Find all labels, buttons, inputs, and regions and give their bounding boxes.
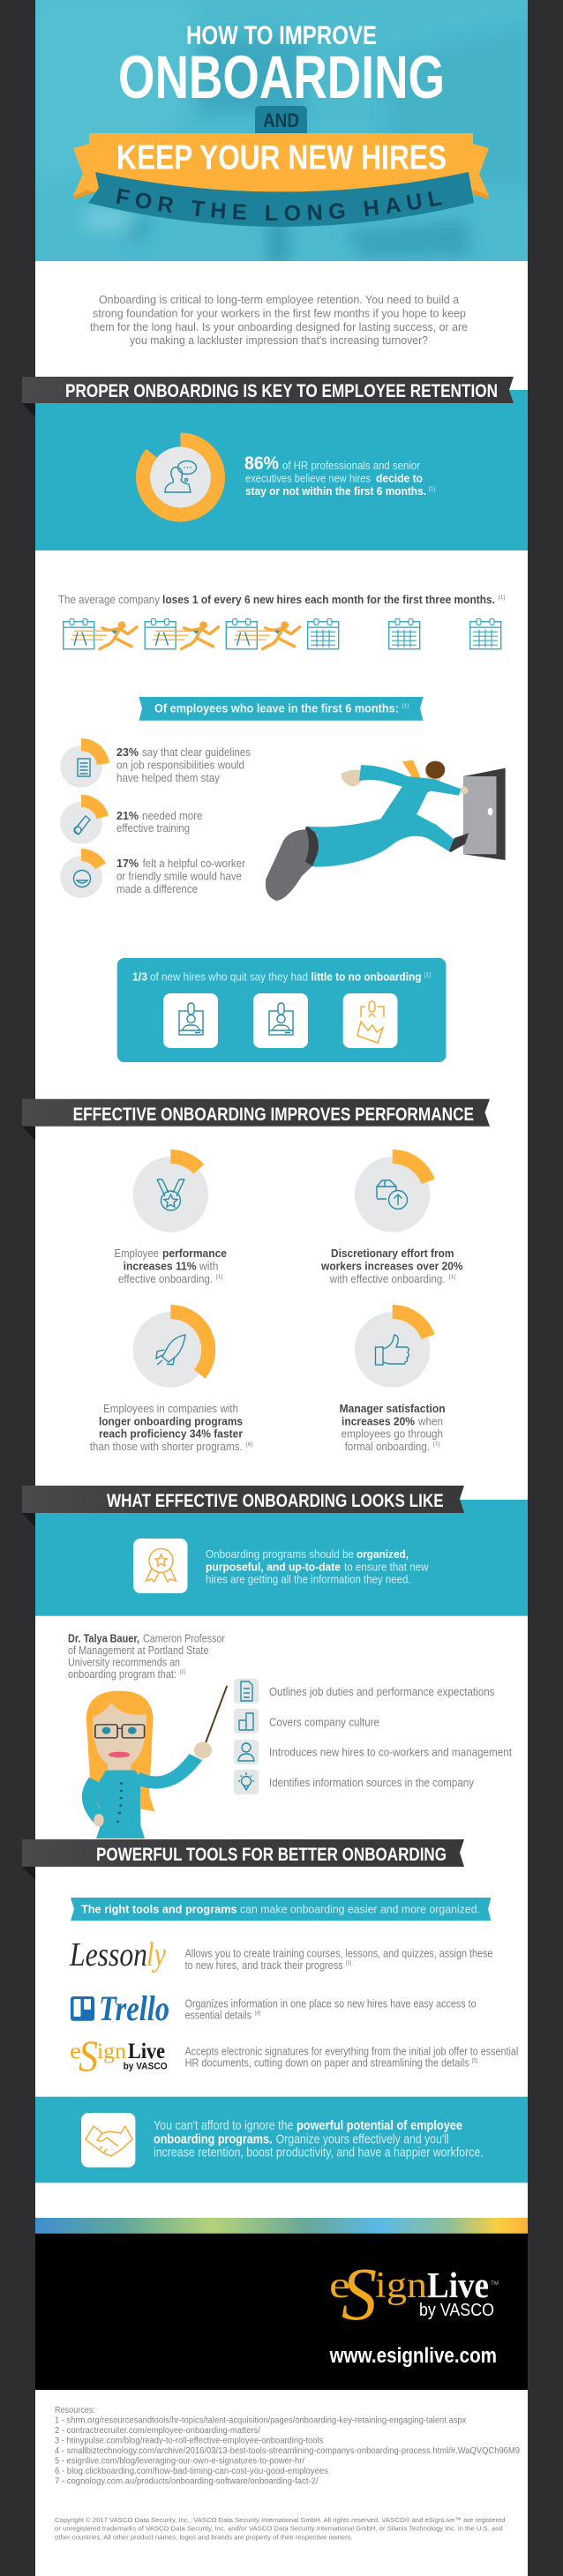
stat text: decide to bbox=[376, 472, 423, 485]
reason: 17% friendly smile: 17% bbox=[116, 857, 139, 870]
icon: diploma bbox=[74, 816, 90, 835]
tool: Lessonly: [3] bbox=[346, 1960, 351, 1966]
tool: eSignLive: HR documents, cutting down on paper and streamlining the details bbox=[185, 2056, 469, 2070]
section banner 1 bbox=[22, 377, 514, 417]
logo: eSignLive by VASCO: TM bbox=[491, 2280, 499, 2287]
section banner 4: POWERFUL TOOLS FOR BETTER ONBOARDING bbox=[96, 1845, 447, 1865]
checklist: recommendations bbox=[234, 1679, 512, 1794]
reason: 23% guidelines: 23% bbox=[116, 745, 139, 759]
metric: manager satisfaction 20%: employees go through bbox=[342, 1427, 443, 1441]
illustration: woman with pointer bbox=[86, 1686, 227, 1838]
loses 1 of 6 statement: The average company bbox=[58, 593, 160, 606]
metric: performance 11%: [1] bbox=[216, 1274, 222, 1280]
reason: 21% training: needed more bbox=[142, 809, 203, 822]
metric: proficiency 34%: Employees in companies with bbox=[103, 1402, 238, 1415]
section banner 2: EFFECTIVE ONBOARDING IMPROVES PERFORMANCE bbox=[73, 1105, 474, 1125]
panel: 1/3 of new hires: [1] bbox=[424, 972, 431, 978]
panel: 86% stat band bbox=[35, 390, 528, 550]
metric: performance 11% bbox=[115, 1157, 227, 1285]
logo: eSignLive by VASCO bbox=[329, 2251, 499, 2336]
and tab: AND bbox=[263, 109, 299, 131]
stat text: of HR professionals and senior bbox=[282, 459, 421, 472]
calendar and runner pictogram row bbox=[64, 618, 501, 649]
reason: 17% friendly smile: or friendly smile would have bbox=[116, 870, 242, 883]
section banner 3: WHAT EFFECTIVE ONBOARDING LOOKS LIKE bbox=[107, 1491, 444, 1511]
website url: www.esignlive.com bbox=[329, 2344, 497, 2368]
ribbon headline: KEEP YOUR NEW HIRES bbox=[116, 139, 447, 176]
ribbon: right tools: The right tools and programs bbox=[81, 1902, 237, 1915]
panel: closing statement band: onboarding programs. bbox=[154, 2131, 272, 2146]
copyright notice: Copyright © 2017 VASCO Data Security, Inc., VASCO Data Security International GmbH. All rights reserved. VASCO® and eSignLive™ are registered bbox=[55, 2516, 506, 2524]
metric: performance 11%: increases 11% bbox=[124, 1260, 197, 1273]
loses 1 of 6 statement: [1] bbox=[499, 595, 505, 601]
section banner 3 bbox=[22, 1486, 464, 1527]
rainbow gradient strip bbox=[35, 2218, 528, 2234]
curved tagline: FOR THE LONG HAUL bbox=[116, 189, 442, 221]
reason: 17% friendly smile bbox=[60, 855, 246, 898]
logo: Lessonly: Lesson bbox=[69, 1936, 147, 1973]
icon: thumbs up bbox=[376, 1335, 409, 1365]
tool: Trello: essential details bbox=[185, 2009, 251, 2022]
donut chart: 86% bbox=[143, 439, 218, 515]
copyright notice bbox=[55, 2516, 506, 2541]
panel: organized, purposeful band: hires are getting all the information they need. bbox=[206, 1573, 411, 1586]
Dr. Talya Bauer intro: onboarding program that: bbox=[68, 1667, 176, 1681]
metric: proficiency 34% bbox=[90, 1312, 252, 1453]
item: introduces co-workers: Introduces new hires to co-workers and management bbox=[269, 1746, 512, 1759]
tool: Lessonly: Allows you to create training courses, lessons, and quizzes, assign these bbox=[185, 1947, 492, 1960]
panel: organized, purposeful band: Onboarding programs should be bbox=[206, 1547, 354, 1561]
logo: eSignLive by VASCO: ign bbox=[375, 2265, 427, 2306]
stat text: executives believe new hires bbox=[245, 472, 371, 485]
tool: Trello: [4] bbox=[255, 2011, 260, 2017]
reason: 23% guidelines: have helped them stay bbox=[116, 771, 220, 784]
metric: manager satisfaction 20%: formal onboarding. bbox=[345, 1440, 430, 1453]
Dr. Talya Bauer intro: of Management at Portland State bbox=[68, 1644, 208, 1657]
logo: eSignLive by VASCO: S bbox=[342, 2251, 377, 2336]
ribbon: right tools bbox=[71, 1898, 491, 1921]
resources list bbox=[55, 2406, 520, 2486]
resources list: 4 - smallbiztechnology.com/archive/2016/03/13-best-tools-streamlining-companys-onboarding-process.html/#.WaQVQCh96M9 bbox=[55, 2446, 520, 2456]
panel: closing statement band: increase retention, boost productivity, and have a happier workforce. bbox=[154, 2145, 484, 2160]
intro paragraph: you making a lackluster impression that's increasing turnover? bbox=[130, 333, 428, 347]
metric: manager satisfaction 20%: increases 20% bbox=[342, 1414, 415, 1427]
reason: 23% guidelines: on job responsibilities would bbox=[116, 759, 244, 772]
logo: eSignLive by VASCO: Live bbox=[427, 2265, 489, 2305]
intro paragraph: them for the long haul. Is your onboarding designed for lasting success, or are bbox=[90, 320, 468, 333]
teal curved ribbon bbox=[88, 172, 474, 227]
intro paragraph: Onboarding is critical to long-term employee retention. You need to build a bbox=[99, 293, 460, 306]
item: information sources bbox=[234, 1770, 474, 1794]
metric: proficiency 34%: than those with shorter programs. bbox=[90, 1440, 243, 1453]
panel: organized, purposeful band: to ensure that new bbox=[344, 1560, 429, 1573]
reason: 17% friendly smile: made a difference bbox=[116, 882, 198, 895]
icon card: award ribbon bbox=[133, 1539, 187, 1593]
resources list: 1 - shrm.org/resourcesandtools/hr-topics/talent-acquisition/pages/onboarding-key-retaining-engaging-talent.aspx bbox=[55, 2416, 466, 2426]
metric: performance 11%: effective onboarding. bbox=[118, 1272, 213, 1285]
tool: eSignLive bbox=[70, 2031, 518, 2080]
metric: performance 11%: with bbox=[199, 1260, 219, 1273]
ribbon: of employees who leave bbox=[139, 697, 424, 721]
metric: proficiency 34%: reach proficiency 34% faster bbox=[99, 1427, 243, 1441]
icon: medal bbox=[157, 1179, 184, 1210]
resources list: 7 - cognology.com.au/products/onboarding-software/onboarding-fact-2/ bbox=[55, 2476, 319, 2486]
metric: manager satisfaction 20%: when bbox=[417, 1414, 443, 1427]
panel: closing statement band: Organize yours effectively and you'll bbox=[276, 2131, 449, 2146]
icon card: broken id badge bbox=[343, 993, 397, 1048]
item: company culture: Covers company culture bbox=[269, 1715, 379, 1728]
icon: document bbox=[78, 759, 90, 776]
item: company culture bbox=[234, 1709, 379, 1734]
intro paragraph bbox=[90, 293, 468, 347]
icon card: handshake bbox=[81, 2113, 135, 2168]
tool: Trello: Organizes information in one place so new hires have easy access to bbox=[185, 1996, 477, 2010]
reason: 21% training bbox=[60, 801, 203, 843]
panel: 1/3 of new hires: little to no onboarding bbox=[311, 970, 422, 984]
icon: box with arrow bbox=[377, 1180, 408, 1209]
resources list: 6 - blog.clickboarding.com/how-bad-timing-can-cost-you-good-employees bbox=[55, 2467, 328, 2476]
panel: organized, purposeful band bbox=[35, 1500, 528, 1616]
orange ribbon bbox=[73, 133, 489, 199]
Dr. Talya Bauer intro bbox=[68, 1632, 226, 1681]
icon: person with speech bubble bbox=[165, 461, 196, 492]
resources list: 5 - esignlive.com/blog/leveraging-our-own-e-signatures-to-power-hr/ bbox=[55, 2456, 304, 2466]
tool: Lessonly bbox=[69, 1936, 492, 1973]
logo: eSignLive: ign bbox=[97, 2040, 127, 2063]
metric: manager satisfaction 20%: [7] bbox=[433, 1442, 439, 1448]
resources list: 3 - htinypulse.com/blog/ready-to-roll-effective-employee-onboarding-tools bbox=[55, 2436, 323, 2445]
ribbon: right tools: can make onboarding easier and more organized. bbox=[240, 1902, 480, 1915]
reason: 21% training: 21% bbox=[116, 809, 139, 822]
panel: 1/3 of new hires: 1/3 bbox=[132, 970, 147, 984]
and tab bbox=[255, 106, 307, 133]
tool: Lessonly: to new hires, and track their progress bbox=[185, 1958, 343, 1972]
ribbon: of employees who leave: Of employees who leave in the first 6 months: bbox=[154, 701, 399, 715]
metric: proficiency 34%: longer onboarding programs bbox=[99, 1414, 243, 1427]
section banner 2 bbox=[22, 1099, 490, 1141]
logo: eSignLive: Live bbox=[128, 2040, 165, 2063]
logo: eSignLive: by VASCO bbox=[124, 2062, 168, 2072]
ribbon: of employees who leave: [1] bbox=[402, 703, 409, 709]
metric: discretionary effort 20%: [1] bbox=[449, 1274, 455, 1280]
icon card: id badge 2 bbox=[253, 993, 308, 1048]
copyright notice: or unregistered trademarks of VASCO Data Security, Inc. and/or VASCO Data Security International GmbH, or Silanis Technology Inc. in the U.S. and bbox=[55, 2525, 503, 2533]
Dr. Talya Bauer intro: [2] bbox=[180, 1669, 185, 1675]
logo: eSignLive by VASCO: e bbox=[329, 2265, 350, 2306]
title: onboarding: ONBOARDING bbox=[118, 43, 445, 111]
copyright notice: other countries. All other product names, logos and brands are property of their respective owners. bbox=[55, 2533, 353, 2541]
door bbox=[463, 768, 506, 860]
tool: Trello bbox=[71, 1988, 477, 2028]
stat text: 86% bbox=[244, 453, 279, 474]
Dr. Talya Bauer intro: University recommends an bbox=[68, 1656, 180, 1669]
logo: Trello: Trello bbox=[99, 1988, 169, 2028]
icon: rocket bbox=[156, 1335, 185, 1365]
intro paragraph: strong foundation for your workers in the first few months if you hope to keep bbox=[93, 307, 466, 319]
reason: 17% friendly smile: felt a helpful co-worker bbox=[143, 857, 246, 870]
metric: performance 11%: Employee bbox=[115, 1247, 159, 1260]
metric: discretionary effort 20%: with effective onboarding. bbox=[329, 1272, 446, 1285]
tool: eSignLive: [5] bbox=[472, 2058, 477, 2064]
item: job duties: Outlines job duties and performance expectations bbox=[269, 1685, 495, 1698]
logo: eSignLive: S bbox=[79, 2031, 98, 2080]
metric: discretionary effort 20%: workers increases over 20% bbox=[320, 1260, 463, 1273]
Dr. Talya Bauer intro: Cameron Professor bbox=[143, 1632, 226, 1645]
loses 1 of 6 statement: loses 1 of every 6 new hires each month for the first three months. bbox=[162, 593, 495, 606]
item: information sources: Identifies information sources in the company bbox=[269, 1776, 474, 1789]
illustration: man running out door bbox=[266, 760, 506, 901]
footer: black brand panel bbox=[35, 2234, 528, 2390]
reason: 23% guidelines bbox=[60, 745, 251, 788]
panel: organized, purposeful band: organized, bbox=[357, 1547, 409, 1561]
metric: performance 11%: performance bbox=[162, 1247, 227, 1260]
running man bbox=[266, 760, 469, 901]
panel: closing statement band bbox=[35, 2097, 528, 2183]
logo: eSignLive by VASCO: by VASCO bbox=[419, 2301, 494, 2320]
metric: manager satisfaction 20%: Manager satisfaction bbox=[340, 1402, 446, 1415]
resources list: Resources: bbox=[55, 2406, 95, 2415]
icon: smiling face bbox=[74, 870, 90, 887]
metric: proficiency 34%: [6] bbox=[246, 1442, 252, 1448]
reason: 21% training: effective training bbox=[116, 821, 190, 835]
reason: 23% guidelines: say that clear guidelines bbox=[142, 745, 251, 759]
icon card: id badge 1 bbox=[163, 993, 218, 1048]
item: introduces co-workers bbox=[234, 1740, 512, 1764]
stat text bbox=[244, 453, 435, 498]
Dr. Talya Bauer intro: Dr. Talya Bauer, bbox=[68, 1632, 139, 1645]
hero header panel bbox=[35, 0, 528, 261]
panel: 1/3 of new hires: of new hires who quit say they had bbox=[150, 970, 308, 984]
metric: manager satisfaction 20% bbox=[340, 1312, 446, 1453]
logo: eSignLive bbox=[70, 2031, 168, 2080]
logo: eSignLive: e bbox=[70, 2040, 81, 2063]
item: job duties bbox=[234, 1679, 495, 1704]
logo: Lessonly: ly bbox=[146, 1936, 166, 1973]
section banner 4 bbox=[22, 1839, 464, 1880]
metric: discretionary effort 20%: Discretionary effort from bbox=[331, 1247, 454, 1260]
metric: discretionary effort 20% bbox=[320, 1157, 463, 1285]
panel: closing statement band: powerful potential of employee bbox=[297, 2118, 462, 2133]
stat text: [1] bbox=[429, 486, 435, 492]
resources list: 2 - contractrecruiter.com/employee-onboarding-matters/ bbox=[55, 2426, 260, 2436]
title: how to improve: HOW TO IMPROVE bbox=[186, 21, 377, 50]
panel: closing statement band: You can't afford to ignore the bbox=[154, 2118, 293, 2133]
panel: organized, purposeful band: purposeful, and up-to-date bbox=[206, 1560, 341, 1573]
stat text: stay or not within the first 6 months. bbox=[245, 484, 426, 498]
logo: Trello bbox=[71, 1988, 169, 2028]
panel: 1/3 of new hires bbox=[117, 958, 446, 1062]
